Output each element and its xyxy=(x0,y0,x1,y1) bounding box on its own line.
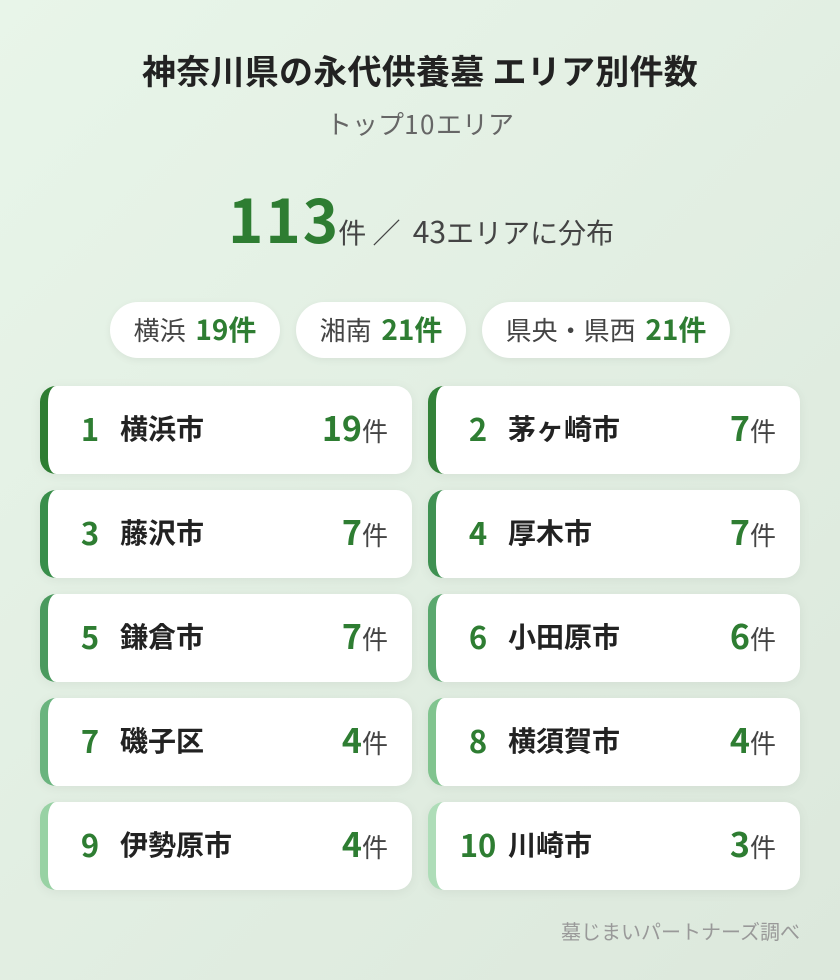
card: rank 1: 横浜市 xyxy=(120,408,204,448)
pill: Shonan: 湘南 21件 xyxy=(320,309,442,349)
card: rank 3: 3 xyxy=(81,509,99,554)
card: rank 6: 6 xyxy=(469,613,487,658)
pill: Yokohama: 横浜 19件 xyxy=(134,309,256,349)
card: rank 3 xyxy=(40,490,412,578)
card: rank 4: 4 xyxy=(469,509,487,554)
card: rank 10: 3件 xyxy=(730,818,776,867)
card: rank 6: 6件 xyxy=(730,610,776,659)
card: rank 3: 7件 xyxy=(342,506,388,555)
card: rank 7 xyxy=(40,698,412,786)
card: rank 7: 7 xyxy=(81,717,99,762)
card: rank 1 xyxy=(40,386,412,474)
card: rank 10: 10 xyxy=(460,821,496,866)
subtitle: トップ10エリア xyxy=(326,105,514,142)
card: rank 6 xyxy=(428,594,800,682)
card: rank 9: 伊勢原市 xyxy=(120,824,232,864)
pill: central and west xyxy=(482,302,730,358)
pill: Yokohama xyxy=(110,302,280,358)
pill: central and west: 県央・県西 21件 xyxy=(506,309,706,349)
card: rank 1: 1 xyxy=(81,405,99,450)
card: rank 8: 8 xyxy=(469,717,487,762)
card: rank 10: 川崎市 xyxy=(508,824,592,864)
card: rank 5: 鎌倉市 xyxy=(120,616,204,656)
card: rank 5 xyxy=(40,594,412,682)
card: rank 4: 7件 xyxy=(730,506,776,555)
card: rank 3: 藤沢市 xyxy=(120,512,204,552)
card: rank 5: 5 xyxy=(81,613,99,658)
total summary: 113件 ／ 43エリアに分布 xyxy=(228,174,614,261)
title: 神奈川県の永代供養墓 エリア別件数 xyxy=(142,45,698,94)
source note: 墓じまいパートナーズ調べ xyxy=(561,916,800,945)
card: rank 2: 7件 xyxy=(730,402,776,451)
card: rank 2: 茅ヶ崎市 xyxy=(508,408,620,448)
card: rank 7: 磯子区 xyxy=(120,720,204,760)
card: rank 7: 4件 xyxy=(342,714,388,763)
card: rank 1: 19件 xyxy=(322,402,388,451)
pill: Shonan xyxy=(296,302,466,358)
card: rank 9 xyxy=(40,802,412,890)
card: rank 8: 横須賀市 xyxy=(508,720,620,760)
card: rank 10 xyxy=(428,802,800,890)
card: rank 8 xyxy=(428,698,800,786)
card: rank 4 xyxy=(428,490,800,578)
card: rank 8: 4件 xyxy=(730,714,776,763)
card: rank 2 xyxy=(428,386,800,474)
card: rank 9: 9 xyxy=(81,821,99,866)
card: rank 5: 7件 xyxy=(342,610,388,659)
card: rank 6: 小田原市 xyxy=(508,616,620,656)
card: rank 4: 厚木市 xyxy=(508,512,592,552)
card: rank 2: 2 xyxy=(469,405,487,450)
card: rank 9: 4件 xyxy=(342,818,388,867)
